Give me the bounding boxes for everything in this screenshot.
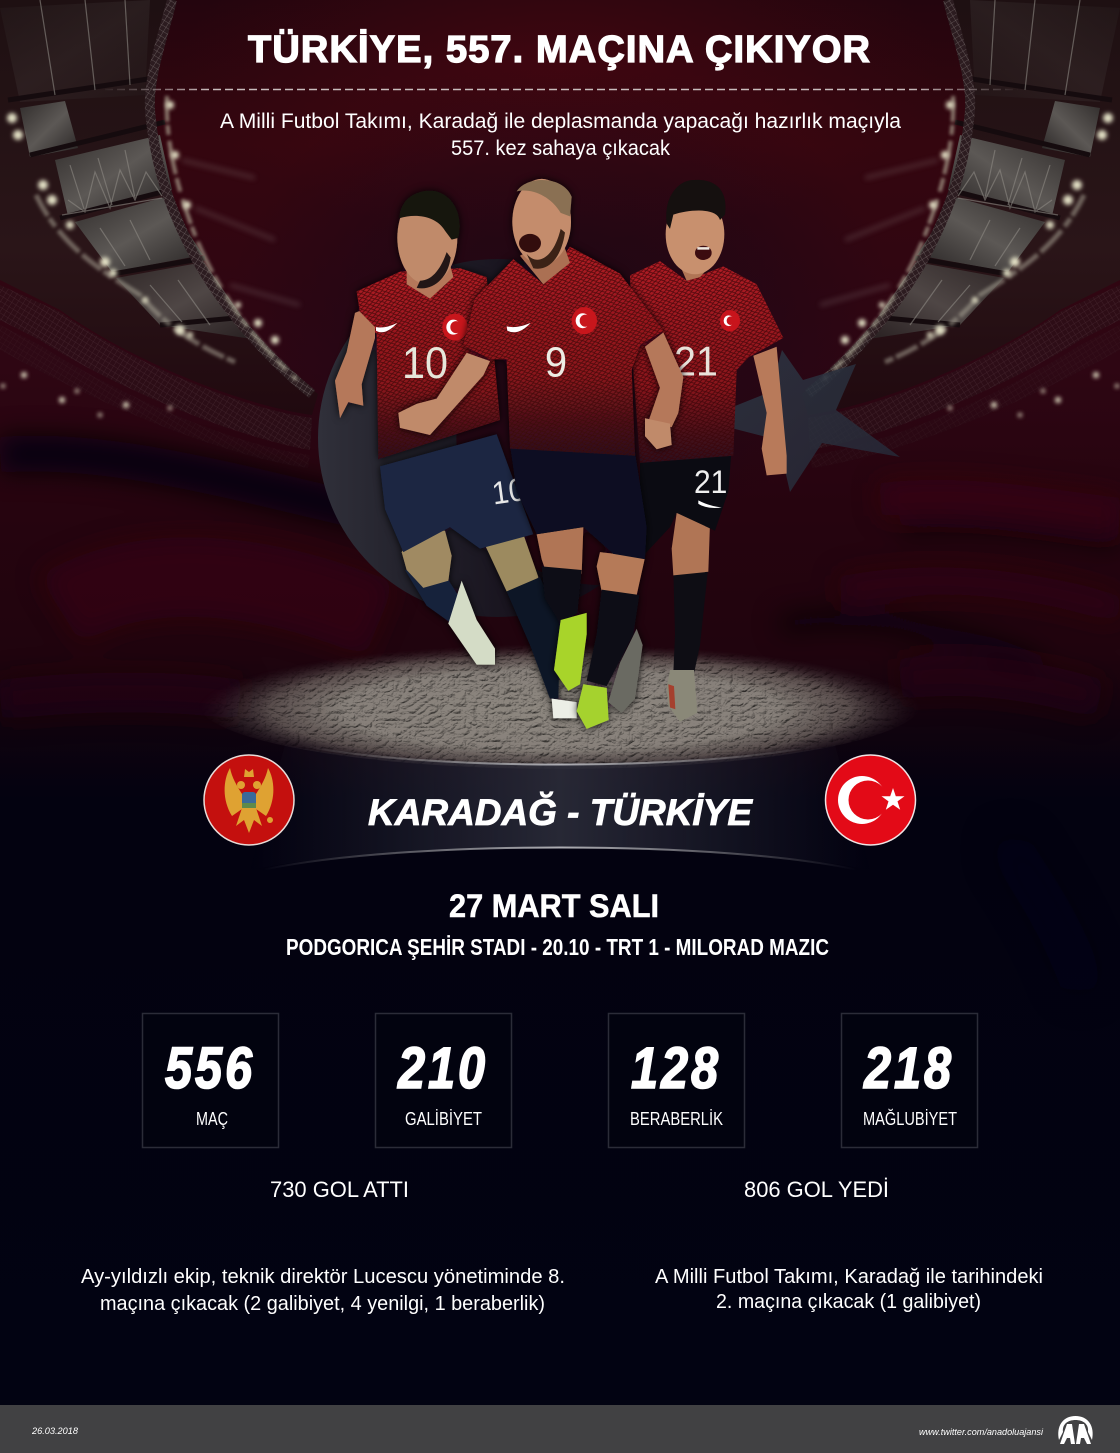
stat: 210 wins: GALİBİYET: [405, 1109, 482, 1129]
footer bar: [0, 1405, 1120, 1453]
player 10: 10: [490, 471, 527, 512]
note: coach record: maçına çıkacak (2 galibiyet, 4 yenilgi, 1 beraberlik): [100, 1293, 545, 1315]
title: TÜRKİYE, 557. MAÇINA ÇIKIYOR: [248, 28, 870, 71]
note: coach record: Ay-yıldızlı ekip, teknik direktör Lucescu yönetiminde 8.: [81, 1266, 565, 1288]
stat: 218 losses: [842, 1014, 978, 1148]
backdrop: star: [700, 350, 900, 492]
stadium stands: right: [802, 0, 1120, 468]
subtitle: [220, 110, 901, 160]
player 10: 10: [402, 339, 448, 388]
goals conceded: 806 GOL YEDİ: [744, 1177, 889, 1202]
subtitle: 557. kez sahaya çıkacak: [451, 137, 670, 160]
player 21: [630, 180, 787, 722]
icon: Turkey flag: [826, 755, 916, 845]
icon: Montenegro flag: [204, 755, 294, 845]
note: Montenegro record: A Milli Futbol Takımı, Karadağ ile tarihindeki: [655, 1266, 1043, 1288]
stat: 556 matches: [142, 1014, 278, 1148]
goals scored: 730 GOL ATTI: [270, 1177, 409, 1202]
match title: KARADAĞ - TÜRKİYE: [368, 791, 753, 833]
player 10: [335, 191, 577, 718]
player 21: 21: [674, 337, 718, 385]
backdrop: crescent: [318, 259, 600, 617]
player 21: 21: [694, 464, 727, 500]
three players: [335, 179, 787, 729]
stat: 218 losses: 218: [863, 1037, 954, 1101]
stat: 556 matches: 556: [165, 1037, 255, 1101]
match banner band: [250, 745, 870, 870]
player 9: [398, 179, 683, 729]
dashed divider: [105, 88, 1018, 90]
player 9: 9: [545, 337, 567, 386]
note: coach record: [81, 1266, 565, 1315]
icon: AA logo: [1058, 1416, 1093, 1444]
stat: 128 draws: BERABERLİK: [630, 1109, 723, 1129]
subtitle: A Milli Futbol Takımı, Karadağ ile deplasmanda yapacağı hazırlık maçıyla: [220, 110, 901, 133]
stat: 128 draws: 128: [631, 1037, 721, 1101]
match date: 27 MART SALI: [449, 888, 659, 924]
stat: 128 draws: [608, 1014, 744, 1148]
footer social link: www.twitter.com/anadoluajansi: [919, 1427, 1044, 1438]
stat: 218 losses: MAĞLUBİYET: [863, 1108, 957, 1129]
stat: 210 wins: [376, 1014, 512, 1148]
spotlight floor: [198, 637, 922, 769]
note: Montenegro record: 2. maçına çıkacak (1 galibiyet): [716, 1291, 981, 1313]
note: Montenegro record: [655, 1266, 1043, 1313]
stadium stands: left: [0, 0, 318, 468]
footer date: 26.03.2018: [31, 1426, 79, 1437]
stat: 556 matches: MAÇ: [196, 1109, 228, 1129]
match details: PODGORICA ŞEHİR STADI - 20.10 - TRT 1 - MILORAD MAZIC: [286, 934, 829, 960]
stat: 210 wins: 210: [397, 1037, 488, 1101]
